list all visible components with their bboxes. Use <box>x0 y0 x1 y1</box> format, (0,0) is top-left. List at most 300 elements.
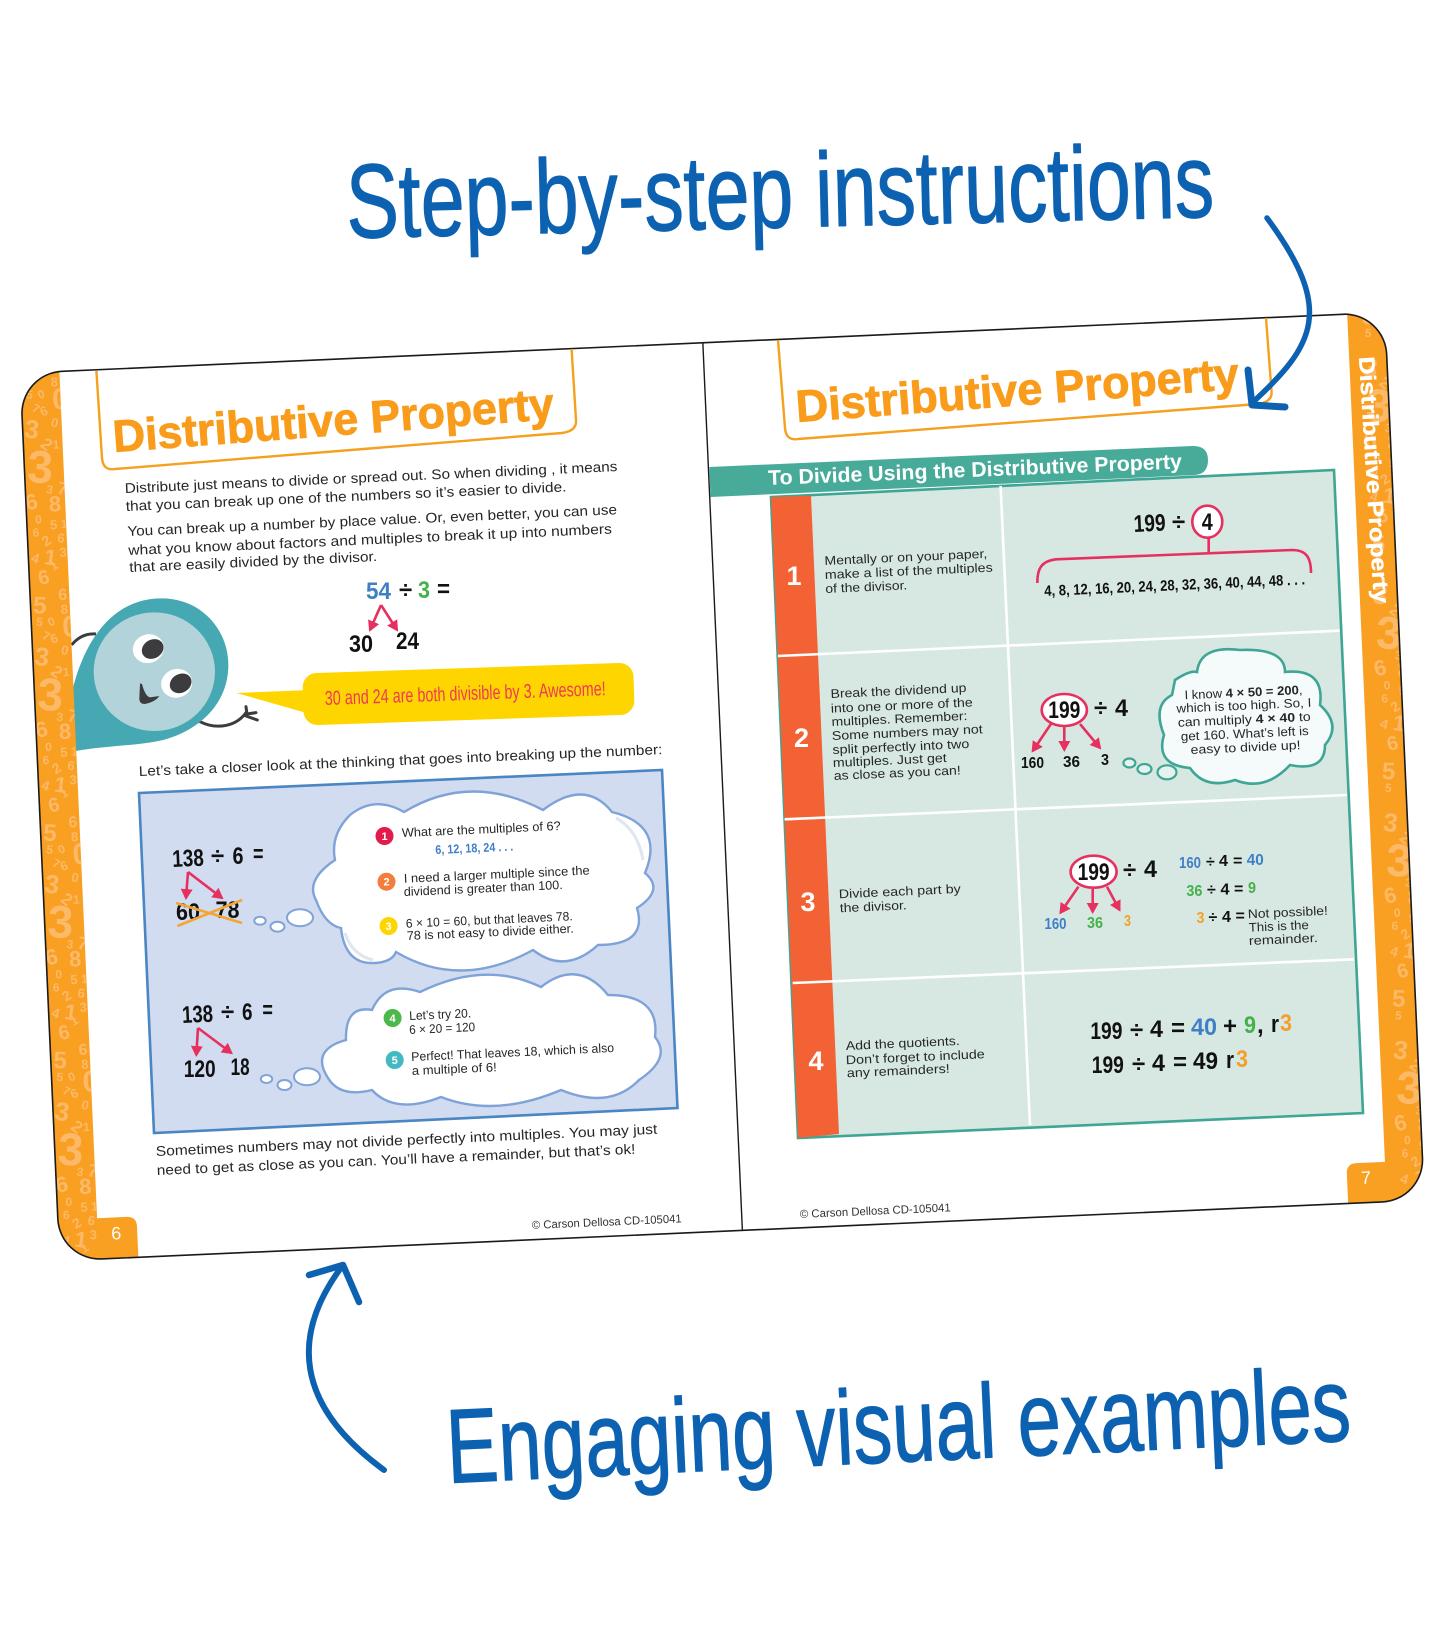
number pattern right: 4 <box>1357 260 1371 278</box>
number pattern left: 1 <box>91 1199 98 1214</box>
example 54 divided by 3: 54 <box>366 578 392 605</box>
number pattern left: 0 <box>51 383 70 416</box>
page number 7: 7 <box>1361 1168 1371 1188</box>
number pattern left: 6 <box>32 525 40 540</box>
number pattern right: 4 <box>1398 1170 1411 1188</box>
number pattern left: 3 <box>59 545 67 560</box>
step 4 text: any remainders! <box>847 1062 950 1080</box>
number pattern left: 1 <box>63 665 70 679</box>
number pattern left: 5 <box>40 290 48 305</box>
step 1 diagram: ÷ <box>1172 509 1185 536</box>
mascot character <box>63 598 257 753</box>
number pattern right: 3 <box>1373 605 1405 660</box>
step 4 equations: r <box>1271 1011 1279 1038</box>
step 4 equations: ÷ <box>1132 1051 1145 1078</box>
number pattern left: 0 <box>41 155 59 189</box>
number pattern right: 0 <box>1404 1133 1411 1147</box>
number pattern right: 8 <box>1377 202 1390 228</box>
number pattern left: 8 <box>81 1057 89 1072</box>
first equation: ÷ <box>211 843 224 870</box>
step 4 equations: , <box>1257 1012 1264 1039</box>
number pattern right: 5 <box>1378 228 1386 243</box>
step 3 equations: = <box>1233 853 1242 870</box>
number pattern left: 3 <box>11 185 32 218</box>
step numbers <box>786 561 824 1076</box>
number pattern left: 5 <box>21 364 38 393</box>
step 2 diagram <box>1021 694 1129 772</box>
step 4 equations: 199 <box>1092 1052 1124 1079</box>
number pattern right: 3 <box>1352 150 1385 205</box>
cloud 1 steps: 3 <box>386 921 392 933</box>
number pattern left: 6 <box>43 943 60 971</box>
number pattern left: 6 <box>48 359 58 377</box>
speech text: 30 and 24 are both divisible by 3. Awesome! <box>324 678 606 710</box>
step 4 equations: = <box>1173 1049 1187 1076</box>
step 2 diagram: 3 <box>1101 752 1109 769</box>
step 2 text <box>830 681 984 783</box>
closing note <box>155 1121 658 1178</box>
number pattern left: 3 <box>42 868 62 901</box>
number pattern right: 3 <box>1393 1060 1425 1115</box>
step 3 diagram <box>1044 856 1158 933</box>
step 3 equations <box>1179 852 1328 948</box>
number pattern left: 6 <box>36 566 52 590</box>
cloud 1 steps: What are the multiples of 6? <box>402 819 561 840</box>
cloud 2 steps: Let’s try 20. <box>409 1006 471 1023</box>
cloud text: get 160. What’s left is <box>1181 724 1309 744</box>
number pattern left: 2 <box>57 889 77 910</box>
first equation: 60 <box>176 899 200 926</box>
number pattern left: 0 <box>35 512 42 527</box>
blue panel: thinking examples <box>139 770 678 1133</box>
cloud text <box>1175 683 1312 757</box>
number pattern right: 3 <box>1390 1034 1411 1066</box>
number pattern left: 5 <box>55 1069 65 1085</box>
step 3 equations: 4 <box>1220 882 1230 898</box>
number pattern left: 1 <box>73 892 80 907</box>
number pattern left: 0 <box>62 610 80 644</box>
step 3 equations: 36 <box>1186 883 1202 900</box>
number pattern right: 4 <box>1388 942 1401 960</box>
number pattern left: 6 <box>58 857 70 875</box>
step 3 equations: ÷ <box>1206 854 1215 871</box>
number pattern right: 6 <box>1381 691 1389 706</box>
number pattern left: 1 <box>50 289 58 304</box>
number pattern right: 1 <box>1380 482 1398 509</box>
number pattern left: 1 <box>70 744 78 759</box>
number pattern left: 1 <box>42 210 50 224</box>
first equation: = <box>253 841 264 868</box>
number pattern left: 5 <box>80 1199 88 1215</box>
number pattern right: 6 <box>1375 504 1390 529</box>
step 3 text <box>839 882 962 915</box>
number pattern right: 6 <box>1381 882 1399 909</box>
number pattern left: 0 <box>49 414 61 431</box>
number pattern left: 1 <box>42 544 59 571</box>
step numbers: 3 <box>800 887 816 917</box>
number pattern right: 1 <box>1390 709 1408 737</box>
number pattern left: 7 <box>39 628 53 644</box>
cloud 2 steps: Perfect! That leaves 18, which is also <box>411 1041 614 1064</box>
intro text: Distribute just means to divide or spread out. So when dividing , it means <box>124 458 618 496</box>
number pattern left: 2 <box>69 1214 85 1232</box>
step 1 diagram <box>1037 506 1311 600</box>
step 2 text: multiples. Remember: <box>831 709 968 729</box>
number pattern right: 2 <box>1367 242 1383 261</box>
step 3 text: the divisor. <box>840 898 907 915</box>
number pattern left: 7 <box>55 477 70 500</box>
number pattern left: 3 <box>14 212 46 267</box>
left orange strip <box>20 369 138 1261</box>
number pattern left: 1 <box>60 517 68 531</box>
number pattern left: 0 <box>66 1069 78 1085</box>
number pattern left: 1 <box>52 771 69 799</box>
number pattern left: 8 <box>50 374 58 389</box>
number pattern left: 1 <box>81 972 88 986</box>
number pattern left: 7 <box>75 932 91 955</box>
banner text: To Divide Using the Distributive Property <box>768 450 1183 490</box>
number pattern right: 8 <box>1417 1112 1431 1137</box>
number pattern right: 3 <box>1370 579 1391 611</box>
number pattern left: 6 <box>46 793 62 818</box>
second equation: 120 <box>184 1056 216 1083</box>
number pattern left: 8 <box>79 1174 92 1199</box>
number pattern left: 2 <box>38 531 54 550</box>
cloud text: can multiply 4 × 40 to <box>1178 710 1311 730</box>
step 4 equations: r <box>1226 1047 1234 1074</box>
number pattern left: 2 <box>36 434 57 455</box>
copyright right: © Carson Dellosa CD-105041 <box>800 1202 951 1221</box>
number pattern right: 3 <box>1414 1103 1424 1118</box>
number pattern left: 6 <box>22 298 30 312</box>
number pattern left: 4 <box>29 549 43 567</box>
number pattern right: 6 <box>1395 959 1411 984</box>
number pattern right: 1 <box>1395 723 1410 740</box>
number pattern right: 3 <box>1373 193 1383 208</box>
centre fold <box>703 343 742 1230</box>
step 3 equations: 3 <box>1196 910 1205 927</box>
intro text: that you can break up one of the numbers so it’s easier to divide. <box>125 478 567 514</box>
step 4 equations: 4 <box>1150 1016 1164 1043</box>
example 54 divided by 3: 24 <box>396 628 420 655</box>
step 4 equations: 49 <box>1193 1048 1218 1075</box>
intro text <box>124 458 618 575</box>
number pattern left: 8 <box>61 602 68 617</box>
number pattern right: 0 <box>1363 223 1371 238</box>
step 1 text: of the divisor. <box>825 578 908 596</box>
step 3 diagram: 36 <box>1087 915 1103 932</box>
number pattern left: 2 <box>49 759 64 777</box>
number pattern right: 8 <box>1387 430 1400 455</box>
number pattern left: 6 <box>46 302 56 319</box>
number pattern left <box>24 377 97 1253</box>
number pattern left: 8 <box>48 491 62 517</box>
cloud 2 steps: 6 × 20 = 120 <box>409 1020 476 1037</box>
number pattern left: 0 <box>79 1097 91 1113</box>
cloud text: which is too high. So, I <box>1175 696 1312 716</box>
number pattern right: 3 <box>1404 875 1414 891</box>
step 2 text: split perfectly into two <box>832 737 970 757</box>
first equation: 78 <box>216 897 240 924</box>
number pattern left: 0 <box>25 159 37 175</box>
step 3 equations: 160 <box>1179 855 1201 872</box>
second equation: ÷ <box>221 999 234 1026</box>
step 2 text: multiples. Just get <box>833 751 948 770</box>
number pattern right: 2 <box>1405 1055 1426 1076</box>
number pattern left: 7 <box>44 250 60 272</box>
number pattern right: 1 <box>1370 255 1388 282</box>
number pattern left: 8 <box>38 264 51 289</box>
number pattern left: 7 <box>65 705 81 727</box>
arrow: to left page <box>309 1265 384 1470</box>
example 54 divided by 3 <box>349 576 450 658</box>
number pattern left: 6 <box>38 403 50 420</box>
number pattern left: 1 <box>72 1226 90 1253</box>
number pattern left: 6 <box>63 1208 70 1222</box>
number pattern right: 0 <box>1383 678 1391 692</box>
number pattern left: 6 <box>12 261 30 288</box>
number pattern right: 5 <box>1380 757 1397 786</box>
number pattern left: 6 <box>68 1085 81 1102</box>
cloud 2 steps: a multiple of 6! <box>412 1060 497 1078</box>
number pattern left: 3 <box>35 254 45 270</box>
step 1 diagram: 4 <box>1202 509 1213 536</box>
number pattern left: 8 <box>68 946 82 972</box>
number pattern right: 6 <box>1351 199 1369 227</box>
number pattern left: 5 <box>31 592 48 620</box>
number pattern right: 1 <box>1411 1164 1428 1192</box>
first equation: 138 <box>172 845 204 873</box>
number pattern right: 6 <box>1364 277 1380 301</box>
right title tab <box>778 318 1272 439</box>
number pattern left: 7 <box>29 401 43 417</box>
number pattern right: 8 <box>1407 884 1420 910</box>
number pattern right: 8 <box>1397 657 1410 683</box>
step 3 equations: This is the <box>1249 918 1309 935</box>
number pattern left: 5 <box>70 972 78 987</box>
number pattern left: 4 <box>19 321 32 340</box>
number pattern right: 6 <box>1401 1146 1409 1161</box>
example 54 divided by 3: 30 <box>349 631 373 658</box>
number pattern right: 5 <box>1370 530 1387 559</box>
thought dots 3 <box>1123 758 1176 779</box>
number pattern left: 6 <box>27 175 40 192</box>
number pattern left: 7 <box>85 1160 101 1182</box>
number pattern right: 5 <box>1373 553 1383 568</box>
number pattern left: 3 <box>24 439 56 494</box>
number pattern left: 5 <box>35 614 45 630</box>
cloud 1 steps: 78 is not easy to divide either. <box>407 922 574 943</box>
number pattern left: 5 <box>45 842 55 857</box>
second equation: 138 <box>181 1001 214 1029</box>
number pattern left: 6 <box>68 814 78 832</box>
number pattern left: 3 <box>89 1227 97 1242</box>
cloud 1 steps: 6, 12, 18, 24 . . . <box>435 840 514 857</box>
cloud 1 steps: dividend is greater than 100. <box>404 878 563 899</box>
step 4 equations: 3 <box>1280 1010 1292 1037</box>
step numbers: 4 <box>808 1046 824 1076</box>
number pattern right: 6 <box>1385 732 1401 756</box>
teal banner <box>709 446 1208 497</box>
cloud 2 steps: 5 <box>392 1055 398 1067</box>
number pattern right: 6 <box>1392 1109 1409 1137</box>
cloud text: I know 4 × 50 = 200, <box>1184 683 1303 702</box>
number pattern right: 3 <box>1380 806 1401 839</box>
number pattern left: 5 <box>60 745 68 760</box>
step 2 diagram: 160 <box>1021 755 1044 772</box>
number pattern left: 6 <box>66 757 76 774</box>
example 54 divided by 3: = <box>437 576 450 603</box>
step 2 text: Some numbers may not <box>832 722 984 743</box>
second equation <box>181 997 273 1083</box>
number pattern right: 3 <box>1363 378 1395 433</box>
number pattern left: 2 <box>28 304 44 322</box>
second equation: = <box>262 997 273 1024</box>
step 1 text: make a list of the multiples <box>825 561 993 582</box>
step 3 equations: 4 <box>1222 909 1231 926</box>
number pattern left: 6 <box>58 587 68 604</box>
right title text: Distributive Property <box>794 348 1240 432</box>
cloud 2 steps: 4 <box>390 1013 397 1025</box>
number pattern right: 5 <box>1409 910 1416 926</box>
step 3 equations: 4 <box>1219 853 1228 870</box>
number pattern right: 5 <box>1419 1138 1427 1153</box>
number pattern left: 0 <box>56 841 68 857</box>
number pattern right: 5 <box>1394 1008 1404 1023</box>
number pattern right: 5 <box>1360 302 1377 331</box>
number pattern left: 3 <box>45 482 55 497</box>
first equation: 6 <box>232 843 244 870</box>
number pattern right: 1 <box>1401 937 1418 964</box>
number pattern left: 3 <box>31 640 52 673</box>
step numbers: 1 <box>786 561 802 591</box>
number pattern left: 6 <box>53 980 60 995</box>
step 4 text: Add the quotients. <box>846 1034 960 1053</box>
number pattern left: 1 <box>36 329 51 347</box>
right orange strip <box>1346 315 1422 1203</box>
number pattern right: 1 <box>1375 268 1389 285</box>
thought dots 1 <box>254 909 313 932</box>
number pattern left: 0 <box>82 1065 100 1099</box>
number pattern left: 3 <box>69 772 77 787</box>
number pattern left: 8 <box>58 719 72 744</box>
book frame <box>8 96 1433 1261</box>
intro text: You can break up a number by place value. Or, even better, you can use <box>127 501 617 539</box>
step 1 text <box>824 547 993 596</box>
yellow speech bubble <box>236 663 635 725</box>
number pattern left: 3 <box>21 413 42 446</box>
step 3 equations: remainder. <box>1249 931 1318 948</box>
number pattern right: 5 <box>1398 683 1406 698</box>
arrow: to right title <box>1248 218 1309 407</box>
copyright left: © Carson Dellosa CD-105041 <box>532 1213 682 1232</box>
number pattern left: 0 <box>55 967 63 982</box>
number pattern left: 3 <box>44 894 77 949</box>
intro text: what you know about factors and multiples to break it up into numbers <box>127 520 612 558</box>
number pattern right: 4 <box>1377 715 1391 733</box>
step 3 diagram: 4 <box>1144 856 1158 883</box>
number pattern left: 0 <box>45 740 52 754</box>
number pattern right: 0 <box>1394 906 1401 920</box>
number pattern left: 0 <box>72 838 90 871</box>
step 3 equations: 9 <box>1248 880 1256 897</box>
number pattern left: 3 <box>75 1164 85 1180</box>
number pattern left: 6 <box>76 985 87 1001</box>
number pattern left: 1 <box>77 1239 91 1257</box>
step 3 equations: Not possible! <box>1248 904 1328 921</box>
step 3 text: Divide each part by <box>839 882 962 901</box>
number pattern right: 3 <box>1360 351 1381 384</box>
number pattern left: 2 <box>46 661 67 683</box>
number pattern right: 2 <box>1397 925 1413 943</box>
number pattern left: 0 <box>39 187 50 204</box>
number pattern right: 2 <box>1407 1152 1423 1171</box>
step 2 diagram: 4 <box>1115 695 1129 722</box>
number pattern right: 5 <box>1363 325 1373 341</box>
closer look sentence: Let’s take a closer look at the thinking that goes into breaking up the number: <box>138 741 663 779</box>
grid lines <box>778 486 1354 1125</box>
number pattern left: 6 <box>56 1021 72 1045</box>
number pattern left: 8 <box>71 829 79 844</box>
number pattern right: 0 <box>1373 451 1381 465</box>
table <box>771 470 1363 1138</box>
cloud 1 steps: 6 × 10 = 60, but that leaves 78. <box>406 909 573 931</box>
step column <box>771 496 839 1138</box>
number pattern right: 3 <box>1350 124 1371 157</box>
number pattern left: 0 <box>69 869 81 886</box>
left title tab <box>96 349 576 469</box>
step 3 equations: ÷ <box>1207 882 1216 899</box>
step 2 diagram: 199 <box>1048 697 1080 724</box>
number pattern right: 3 <box>1383 832 1415 888</box>
number pattern left: 6 <box>26 339 42 363</box>
number pattern right: 2 <box>1395 827 1416 849</box>
number pattern left: 0 <box>35 386 47 402</box>
number pattern left: 5 <box>50 517 58 532</box>
step 4 equations: 40 <box>1191 1014 1217 1041</box>
cloud text: easy to divide up! <box>1190 738 1301 757</box>
number pattern right: 2 <box>1385 600 1405 621</box>
step 2 text: into one or more of the <box>831 695 973 716</box>
number pattern left: 0 <box>45 614 58 630</box>
cloud 2 steps <box>384 1006 614 1078</box>
number pattern right: 2 <box>1375 372 1395 394</box>
page number 6: 6 <box>111 1223 122 1244</box>
step 4 text <box>846 1034 985 1080</box>
number pattern right: 5 <box>1390 985 1407 1014</box>
number pattern left: 7 <box>60 1083 73 1099</box>
step 4 equations: 199 <box>1090 1018 1122 1045</box>
step 4 equations: 9 <box>1244 1012 1256 1039</box>
number pattern right: 6 <box>1371 654 1389 682</box>
orange strips <box>8 96 1433 1261</box>
cloud 1 <box>313 791 653 971</box>
step 4 equations: 4 <box>1152 1050 1166 1077</box>
example 54 divided by 3: ÷ <box>399 577 412 604</box>
number pattern left: 6 <box>48 630 60 647</box>
number pattern left: 0 <box>65 1195 73 1209</box>
number pattern right: 1 <box>1405 950 1420 967</box>
number pattern left: 2 <box>59 986 74 1005</box>
number pattern left: 6 <box>42 753 50 767</box>
step 4 equations: + <box>1223 1013 1237 1040</box>
number pattern left: 6 <box>23 488 40 516</box>
number pattern left: 6 <box>78 1042 88 1059</box>
number pattern left: 1 <box>52 437 60 452</box>
number pattern left: 3 <box>65 937 75 952</box>
cloud 1 steps: 2 <box>383 877 390 889</box>
number pattern left: 4 <box>59 1231 73 1250</box>
